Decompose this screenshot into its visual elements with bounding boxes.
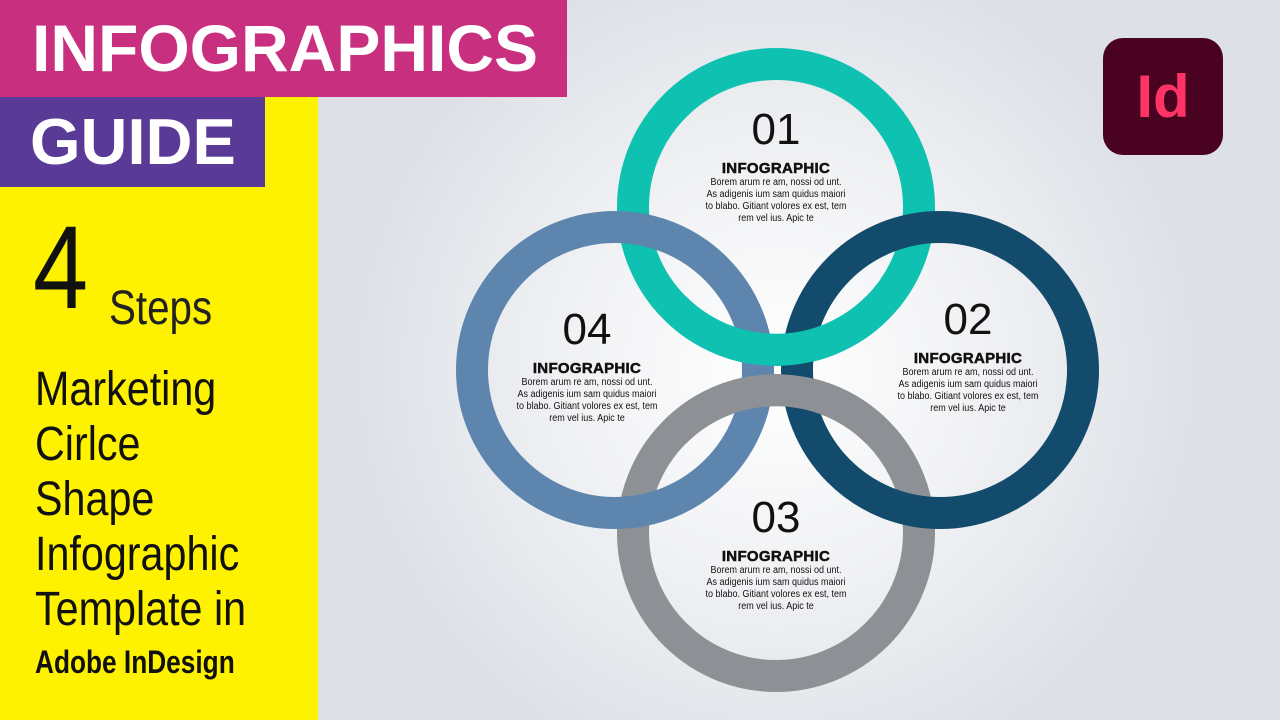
text block: 02: Borem arum re am, nossi od unt.: [902, 367, 1034, 378]
text block: 04: Borem arum re am, nossi od unt.: [521, 377, 653, 388]
text block: 01: to blabo. Gitiant volores ex est, tem: [705, 201, 847, 212]
text block: 01: As adigenis ium sam quidus maiori: [706, 189, 846, 200]
text: title lines: Cirlce: [35, 418, 140, 471]
banner: INFOGRAPHICS: [0, 0, 567, 97]
text: 4 Steps: 4: [33, 202, 88, 334]
text: title lines: Template in: [35, 583, 246, 636]
text block: 04: [516, 305, 658, 424]
text block: 04: rem vel ius. Apic te: [549, 413, 625, 424]
panel: yellow sidebar: [0, 0, 318, 720]
text block: 02: [897, 295, 1039, 414]
text block: 04: As adigenis ium sam quidus maiori: [517, 389, 657, 400]
text block: 03: 03: [752, 493, 800, 542]
banner: GUIDE: [0, 97, 265, 187]
text block: 02: rem vel ius. Apic te: [930, 403, 1006, 414]
text block: 02: to blabo. Gitiant volores ex est, tem: [897, 391, 1039, 402]
icon: InDesign logo: Id: [1136, 63, 1190, 130]
banner: INFOGRAPHICS: INFOGRAPHICS: [32, 11, 538, 85]
text: 4 Steps: Steps: [109, 282, 212, 335]
icon: InDesign logo: [1103, 38, 1223, 155]
text: title lines: Marketing: [35, 363, 216, 416]
text block: 02: INFOGRAPHIC: [914, 350, 1022, 367]
text block: 01: Borem arum re am, nossi od unt.: [710, 177, 842, 188]
text block: 01: [705, 105, 847, 224]
text: title lines: Shape: [35, 473, 154, 526]
text: Adobe InDesign: Adobe InDesign: [35, 644, 235, 680]
text block: 03: As adigenis ium sam quidus maiori: [706, 577, 846, 588]
banner: GUIDE: GUIDE: [30, 105, 236, 178]
text block: 01: 01: [752, 105, 800, 154]
text block: 01: INFOGRAPHIC: [722, 160, 830, 177]
text block: 01: rem vel ius. Apic te: [738, 213, 814, 224]
text block: 04: INFOGRAPHIC: [533, 360, 641, 377]
text: title lines: Infographic: [35, 528, 239, 581]
text block: 03: rem vel ius. Apic te: [738, 601, 814, 612]
text block: 04: to blabo. Gitiant volores ex est, tem: [516, 401, 658, 412]
text block: 03: Borem arum re am, nossi od unt.: [710, 565, 842, 576]
text block: 03: [705, 493, 847, 612]
text block: 02: As adigenis ium sam quidus maiori: [898, 379, 1038, 390]
text: 4 Steps: [33, 202, 212, 335]
text block: 04: 04: [563, 305, 611, 354]
text block: 03: INFOGRAPHIC: [722, 548, 830, 565]
text block: 03: to blabo. Gitiant volores ex est, tem: [705, 589, 847, 600]
text: title lines: [35, 363, 246, 636]
text block: 02: 02: [944, 295, 992, 344]
